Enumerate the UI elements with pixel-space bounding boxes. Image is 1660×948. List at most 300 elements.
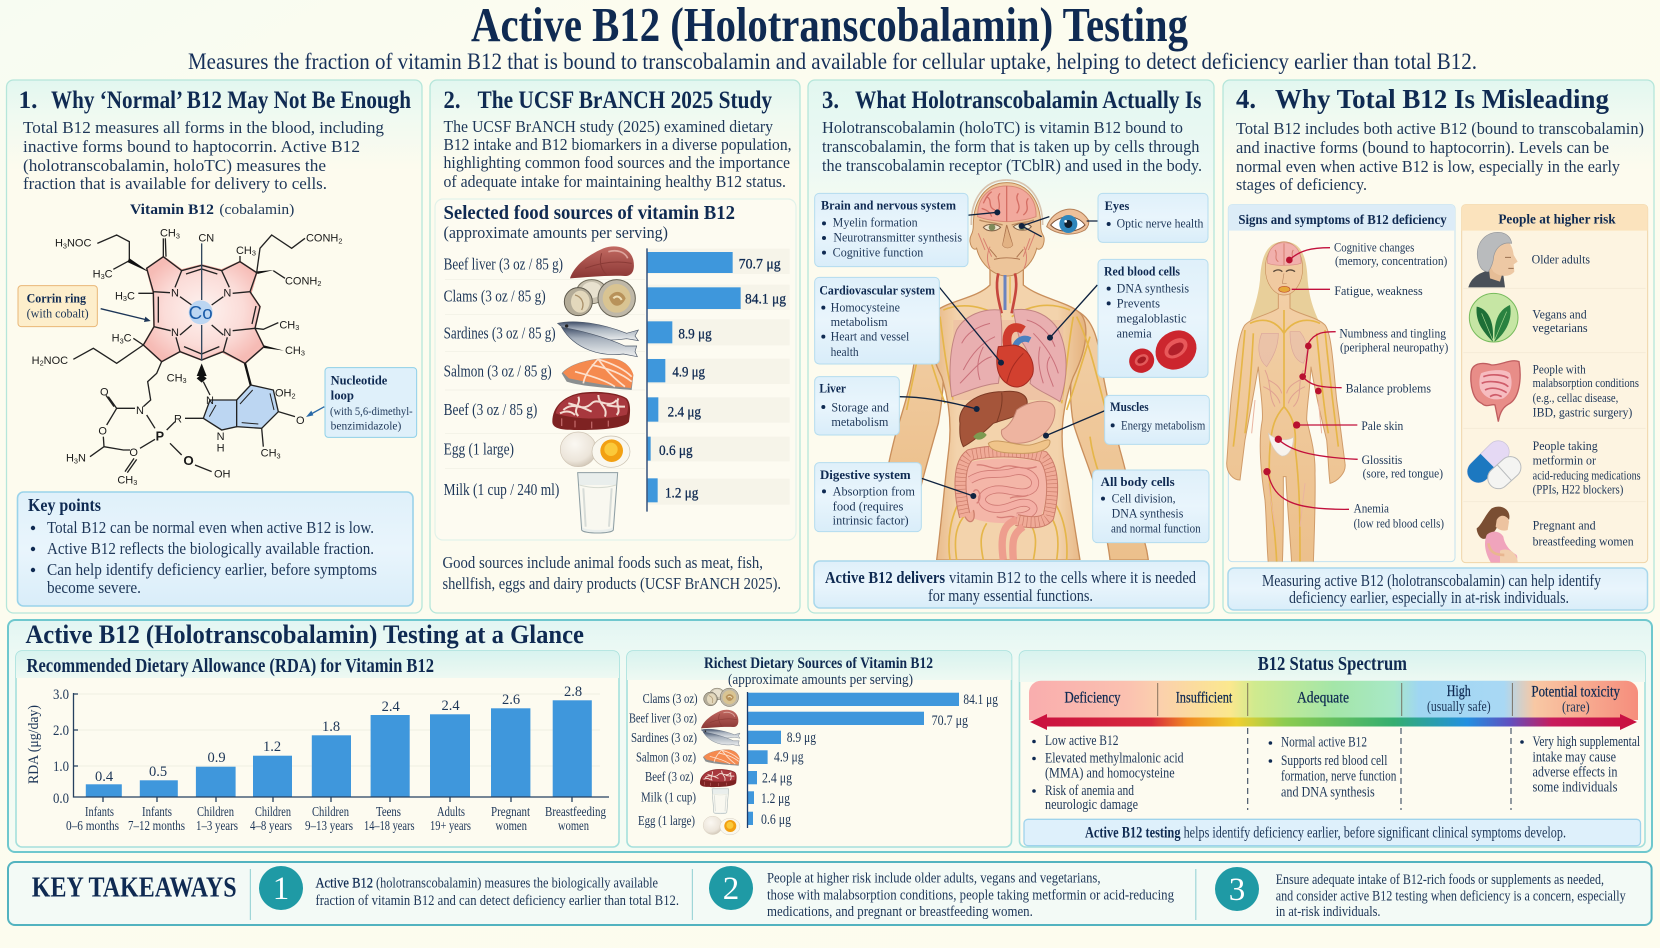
food row labels: Clams (3 oz): [643, 692, 698, 707]
callout: nucleotide loop: loop: [331, 387, 354, 402]
dashed dividers: [1248, 728, 1511, 810]
molecule side chains: O: [98, 425, 107, 437]
y tick labels: 1.0: [53, 759, 69, 775]
callout: brain and nervous system: Neurotransmitter synthesis: [833, 231, 962, 245]
panel: key takeaways: [8, 862, 1652, 925]
molecule side chains: 2: [40, 359, 44, 368]
molecule side chains: 3: [74, 456, 78, 465]
column: toxicity bullets: some individuals: [1532, 780, 1618, 796]
callout: brain and nervous system: Brain and nervous system: [821, 198, 956, 212]
icon: older adult: [1468, 232, 1518, 287]
symptom labels: (memory, concentration): [1335, 254, 1447, 268]
card: signs and symptoms: Signs and symptoms of B12 deficiency: [1238, 212, 1447, 227]
heading: panel 2: 2.: [444, 87, 460, 114]
y tick labels: 2.0: [53, 723, 69, 739]
molecule side chains: O: [183, 453, 194, 468]
molecule side chains: NOC: [67, 238, 91, 250]
food labels: Salmon (3 oz / 85 g): [444, 362, 552, 381]
category labels: [66, 805, 606, 834]
symptom labels: Pale skin: [1361, 419, 1404, 433]
molecule side chains: H: [115, 290, 123, 302]
molecule side chains: NOC: [44, 355, 68, 367]
callout: digestive system: intrinsic factor): [833, 514, 909, 528]
value labels: 2.4: [382, 699, 401, 715]
callout: all body cells: [1093, 470, 1209, 543]
key points box: [18, 492, 413, 606]
risk labels: Pregnant and: [1533, 518, 1596, 532]
callout: testing helps identify: [1024, 819, 1640, 846]
takeaway 1: [259, 866, 679, 910]
symptom labels: Glossitis: [1362, 453, 1402, 467]
symptom labels: (sore, red tongue): [1363, 466, 1443, 480]
panel 3: what holotranscobalamin actually is: [808, 80, 1214, 613]
card heading: (approximate amounts per serving): [444, 223, 668, 242]
icon: pregnant woman: [1477, 507, 1518, 564]
symptom labels: [1334, 241, 1448, 530]
spectrum heading: B12 Status Spectrum: [1258, 653, 1407, 675]
molecule side chains: CH: [160, 228, 176, 240]
food labels: Beef liver (3 oz / 85 g): [444, 254, 563, 273]
column: deficiency bullets: Risk of anemia and: [1045, 783, 1135, 799]
callout: red blood cells: DNA synthesis: [1117, 282, 1189, 296]
text block: good sources: Good sources include animal foods such as meat, fish,: [442, 553, 763, 572]
callout: nucleotide loop: [306, 368, 417, 437]
category labels: 14–18 years: [364, 819, 414, 834]
molecule side chains: C: [105, 268, 113, 280]
category labels: 0–6 months: [66, 819, 119, 834]
callout: muscles: Energy metabolism: [1121, 418, 1205, 432]
icon: milk glass: [578, 473, 618, 533]
risk labels: malabsorption conditions: [1533, 376, 1639, 390]
food labels: Sardines (3 oz / 85 g): [444, 323, 556, 342]
bar chart: RDA: [53, 684, 609, 834]
category labels: women: [558, 819, 589, 834]
takeaway 2: People at higher risk include older adults, vegans and vegetarians,: [767, 871, 1100, 887]
callout: cardiovascular system: Homocysteine: [831, 301, 900, 315]
risk labels: (PPIs, H22 blockers): [1533, 482, 1623, 496]
molecule side chains: R: [174, 414, 182, 426]
bar chart: richest sources: 84.1 μg: [963, 692, 998, 708]
category labels: Children: [255, 805, 291, 820]
molecule side chains: 3: [133, 478, 137, 487]
molecule side chains: CN: [198, 233, 214, 245]
text block: panel 4 intro: stages of deficiency.: [1236, 175, 1367, 194]
heading: panel 3: 3.: [822, 87, 839, 114]
category labels: Breastfeeding: [545, 805, 606, 820]
food row labels: Salmon (3 oz): [636, 751, 696, 766]
values: 2.4 μg: [668, 405, 702, 421]
spectrum band: [1029, 681, 1638, 720]
molecule side chains: 3: [120, 336, 124, 345]
column: adequate bullets: Supports red blood cell: [1281, 753, 1387, 769]
symptom labels: (peripheral neuropathy): [1340, 341, 1448, 355]
symptom labels: Balance problems: [1346, 382, 1431, 396]
molecule side chains: CH: [285, 345, 301, 357]
value labels: 0.4: [95, 769, 114, 785]
takeaway 2: 2: [723, 871, 739, 907]
molecule side chains: 3: [301, 349, 305, 358]
callout: cardiovascular system: [815, 277, 939, 364]
text block: panel 2 intro: highlighting common food sources and the importance: [444, 153, 790, 172]
risk labels: People with: [1533, 362, 1586, 376]
value labels: 0.9: [207, 750, 226, 766]
callout: brain and nervous system: [815, 193, 968, 267]
text block: panel 2 intro: [444, 117, 792, 191]
bar chart: richest sources: 70.7 μg: [932, 713, 968, 729]
value labels: 1.8: [322, 719, 340, 735]
icon: red blood cells: [1125, 322, 1204, 378]
callout: liver: [815, 377, 899, 435]
corrin ring: N: [223, 288, 231, 300]
icon: leaves: [1469, 293, 1518, 342]
column: deficiency bullets: (MMA) and homocysteine: [1045, 766, 1175, 782]
corrin ring: N: [223, 327, 231, 339]
takeaway 3: in at-risk individuals.: [1276, 904, 1380, 920]
molecule side chains: CH: [279, 319, 295, 331]
risk labels: IBD, gastric surgery): [1533, 406, 1632, 420]
text block: good sources: [442, 553, 781, 593]
text block: panel 3 intro: [822, 118, 1202, 175]
callout: nucleotide loop: (with 5,6-dimethyl-: [330, 404, 413, 418]
category labels: Teens: [376, 805, 401, 820]
text block: panel 4 intro: Total B12 includes both active B12 (bound to transcobalamin): [1236, 119, 1644, 138]
molecule side chains: H: [32, 355, 40, 367]
callout: corrin ring: (with cobalt): [27, 306, 89, 320]
callout: cardiovascular system: metabolism: [831, 315, 888, 329]
callout: cardiovascular system: Heart and vessel: [831, 330, 910, 344]
symptom labels: (low red blood cells): [1354, 516, 1444, 530]
y tick labels: [53, 687, 69, 807]
icon: salmon: [562, 358, 633, 390]
key points box: become severe.: [47, 578, 141, 597]
heading: panel 4: 4.: [1236, 84, 1256, 114]
callout: red blood cells: megaloblastic: [1117, 312, 1187, 326]
callout: liver: metabolism: [831, 415, 888, 429]
icon: beef liver: [570, 246, 634, 278]
risk labels: (e.g., cellac disease,: [1533, 391, 1618, 405]
food labels: Clams (3 oz / 85 g): [444, 287, 546, 306]
molecule side chains: OH: [214, 468, 231, 480]
category labels: 19+ years: [430, 819, 471, 834]
molecule side chains: N: [217, 431, 225, 443]
risk labels: People taking: [1533, 439, 1598, 453]
text block: panel 4 intro: [1236, 119, 1644, 194]
icon: sardines: [558, 322, 638, 357]
callout: nucleotide loop: benzimidazole): [331, 419, 401, 433]
values: 0.6 μg: [659, 443, 693, 459]
icon: beef: [552, 392, 630, 430]
molecule side chains: 2: [338, 236, 342, 245]
text block: good sources: shellfish, eggs and dairy products (UCSF BrANCH 2025).: [442, 574, 781, 593]
food labels: [444, 254, 563, 499]
molecule side chains: 3: [295, 323, 299, 332]
risk labels: Vegans and: [1532, 307, 1587, 321]
panel 4: why total B12 is misleading: [1223, 80, 1654, 613]
molecule side chains: H: [112, 333, 120, 345]
richest heading: (approximate amounts per serving): [728, 672, 913, 688]
molecule title: (cobalamin): [219, 202, 294, 218]
card heading: [444, 202, 735, 242]
callout: eyes: Optic nerve health: [1117, 217, 1204, 231]
food row labels: Milk (1 cup): [641, 791, 696, 806]
molecule side chains: CH: [167, 372, 183, 384]
spectrum band: (rare): [1562, 700, 1590, 716]
callout: liver: Liver: [819, 382, 846, 396]
takeaway 3: [1215, 867, 1626, 920]
card heading: Selected food sources of vitamin B12: [444, 202, 735, 224]
category labels: Adults: [437, 805, 465, 820]
callout: liver: Storage and: [831, 400, 890, 414]
molecule side chains: OH: [275, 388, 291, 400]
food row labels: Egg (1 large): [638, 814, 695, 829]
sub-panel: RDA chart: [16, 651, 619, 847]
callout: all body cells: DNA synthesis: [1112, 507, 1183, 521]
takeaway 1: 1: [273, 871, 289, 907]
risk labels: metformin or: [1533, 454, 1597, 468]
values: 84.1 μg: [745, 291, 787, 307]
symptom pointers: [1263, 248, 1358, 509]
molecule side chains: CONH: [306, 233, 338, 245]
panel: testing at a glance: [8, 620, 1652, 852]
key points box: Can help identify deficiency earlier, before symptoms: [47, 560, 377, 579]
spectrum band: High: [1447, 683, 1471, 700]
category labels: 4–8 years: [250, 819, 292, 834]
molecule title: Vitamin B12: [130, 202, 214, 218]
food row labels: [629, 692, 698, 829]
corrin ring: [143, 243, 264, 363]
callout: active B12 delivers: for many essential functions.: [928, 586, 1093, 605]
callout: digestive system: Absorption from: [833, 485, 915, 499]
column: adequate bullets: and DNA synthesis: [1281, 785, 1375, 801]
column: adequate bullets: Normal active B12: [1281, 735, 1367, 751]
category labels: Children: [312, 805, 349, 820]
bar chart: richest sources: 8.9 μg: [787, 730, 816, 746]
text block: panel 1 intro: fraction that is available for delivery to cells.: [23, 174, 327, 193]
richest heading: [704, 655, 933, 688]
molecule side chains: O: [100, 387, 109, 399]
molecule side chains: CH: [261, 448, 277, 460]
molecule diagram: vitamin B12: [18, 202, 417, 487]
heading: at a glance: Active B12 (Holotranscobalamin) Testing at a Glance: [26, 620, 584, 649]
text block: panel 1 intro: [23, 118, 384, 193]
value labels: 2.8: [564, 684, 582, 700]
values: 70.7 μg: [739, 256, 781, 272]
subtitle: Measures the fraction of vitamin B12 that is bound to transcobalamin and available for cellular uptake, helping to detect deficiency earlier than total B12.: [188, 49, 1477, 74]
takeaway 2: those with malabsorption conditions, people taking metformin or acid-reducing: [767, 887, 1174, 903]
molecule side chains: 2: [291, 391, 296, 400]
category labels: Infants: [142, 805, 172, 820]
molecule side chains: H: [93, 268, 101, 280]
text block: panel 3 intro: the transcobalamin receptor (TCblR) and used in the body.: [822, 156, 1202, 175]
callout: red blood cells: Red blood cells: [1104, 264, 1180, 278]
risk labels: vegetarians: [1532, 321, 1588, 335]
callout: eyes: Eyes: [1105, 199, 1129, 213]
icon: eye: [1047, 209, 1089, 234]
takeaway 1: fraction of vitamin B12 and can detect deficiency earlier than total B12.: [316, 893, 679, 909]
molecule side chains: P: [156, 430, 165, 444]
symptom labels: Fatigue, weakness: [1334, 284, 1423, 298]
callout: measuring active B12: deficiency earlier, especially in at-risk individuals.: [1289, 588, 1569, 607]
sub-panel: B12 status spectrum: [1020, 651, 1645, 847]
card: people at higher risk: People at higher risk: [1498, 211, 1616, 226]
column: deficiency bullets: Elevated methylmalonic acid: [1045, 750, 1184, 766]
values: 4.9 μg: [672, 365, 706, 381]
values: [659, 256, 787, 501]
spectrum band: (usually safe): [1427, 699, 1491, 715]
column: deficiency bullets: [1032, 733, 1184, 813]
panel 2: UCSF BrANCH study: [430, 80, 800, 613]
molecule side chains: 3: [101, 272, 105, 281]
callout: eyes: [1098, 193, 1208, 242]
bar chart: richest sources: 2.4 μg: [762, 771, 792, 787]
callout: testing helps identify: helps identify deficiency earlier, before significant clinical symptoms develop.: [1184, 825, 1566, 842]
bar chart: richest sources: 0.6 μg: [761, 812, 791, 828]
molecule side chains: 3: [123, 294, 127, 303]
molecule side chains: CH: [236, 245, 252, 257]
category labels: women: [496, 819, 527, 834]
value labels: 0.5: [149, 764, 167, 780]
sub-panel: richest dietary sources: [627, 651, 1012, 847]
heading: panel 1: Why ‘Normal’ B12 May Not Be Enough: [51, 87, 411, 114]
symptom labels: Cognitive changes: [1334, 241, 1414, 255]
heading: panel 4: Why Total B12 Is Misleading: [1275, 84, 1609, 114]
food labels: Beef (3 oz / 85 g): [444, 400, 537, 419]
anatomy diagram: human body: [815, 180, 1209, 560]
callout: muscles: [1105, 395, 1209, 444]
symptom labels: Numbness and tingling: [1339, 326, 1447, 340]
callout: digestive system: Digestive system: [820, 468, 911, 482]
takeaway 2: medications, and pregnant or breastfeeding women.: [767, 904, 1033, 920]
category labels: 7–12 months: [128, 819, 185, 834]
molecule side chains: 3: [176, 231, 180, 240]
icon: egg: [560, 432, 630, 467]
risk labels: breastfeeding women: [1533, 534, 1634, 548]
column: deficiency bullets: neurologic damage: [1045, 797, 1138, 813]
key points box: Active B12 reflects the biologically available fraction.: [47, 539, 374, 558]
callout: corrin ring: [18, 286, 151, 327]
food row labels: Sardines (3 oz): [631, 731, 697, 746]
molecule side chains: C: [127, 290, 135, 302]
small food icons: [700, 688, 740, 835]
callout: red blood cells: anemia: [1117, 326, 1152, 340]
key points box: Key points: [28, 495, 101, 515]
molecule side chains: O: [296, 415, 305, 427]
icon: pills: [1463, 436, 1525, 493]
bar chart: food sources: [444, 246, 790, 533]
text block: panel 4 intro: normal even when active B12 is low, especially in the early: [1236, 157, 1620, 176]
callout: red blood cells: Prevents: [1117, 296, 1160, 310]
risk labels: Older adults: [1532, 252, 1590, 266]
category labels: Pregnant: [491, 805, 530, 820]
molecule side chains: C: [124, 333, 132, 345]
molecule side chains: N: [206, 395, 214, 407]
column: toxicity bullets: [1520, 734, 1640, 796]
molecule side chains: [32, 228, 342, 487]
molecule side chains: H: [55, 238, 63, 250]
bar chart: richest sources: 1.2 μg: [761, 791, 790, 807]
callout: brain and nervous system: Cognitive function: [833, 246, 924, 260]
spectrum band: Potential toxicity: [1531, 684, 1620, 701]
takeaway 1: Active B12: [316, 875, 373, 891]
body illustration: [885, 180, 1148, 560]
column: deficiency bullets: Low active B12: [1045, 733, 1118, 749]
spectrum band: Adequate: [1297, 690, 1349, 707]
value labels: 2.6: [502, 692, 520, 708]
pointers: anatomy lines: [899, 209, 1105, 499]
heading: panel 2: The UCSF BrANCH 2025 Study: [478, 87, 772, 114]
value labels: 2.4: [441, 698, 460, 714]
takeaway 1: (holotranscobalamin) measures the biologically available: [376, 875, 658, 891]
values: 8.9 μg: [678, 326, 712, 342]
callout: all body cells: and normal function: [1111, 522, 1201, 536]
molecule side chains: 3: [252, 249, 256, 258]
spectrum band: Insufficient: [1176, 690, 1233, 707]
text block: panel 2 intro: of adequate intake for maintaining healthy B12 status.: [444, 172, 786, 191]
callout: all body cells: All body cells: [1101, 475, 1175, 489]
category labels: Infants: [85, 805, 114, 820]
molecule side chains: CONH: [285, 275, 317, 287]
text block: panel 3 intro: transcobalamin, the form that is taken up by cells through: [822, 137, 1200, 156]
card: selected food sources: [435, 199, 796, 540]
callout: cardiovascular system: health: [831, 345, 859, 359]
spectrum band: Deficiency: [1064, 690, 1121, 707]
corrin ring: N: [171, 327, 179, 339]
bar chart: richest sources: 4.9 μg: [774, 750, 804, 766]
icon: intestine: [1471, 361, 1520, 422]
callout: corrin ring: Corrin ring: [27, 290, 86, 305]
text block: panel 4 intro: and inactive forms (bound to haptocorrin). Levels can be: [1236, 138, 1609, 157]
bars: [648, 252, 741, 502]
text block: panel 3 intro: Holotranscobalamin (holoTC) is vitamin B12 bound to: [822, 118, 1183, 137]
spectrum arrow: [1030, 714, 1637, 730]
card: signs and symptoms: [1227, 205, 1455, 563]
callout: brain and nervous system: Myelin formation: [833, 216, 918, 230]
heading: panel 3: What Holotranscobalamin Actually Is: [855, 87, 1202, 114]
takeaway 2: [709, 866, 1174, 920]
molecule side chains: 3: [183, 376, 187, 385]
category labels: 1–3 years: [196, 819, 238, 834]
text block: panel 1 intro: inactive forms bound to haptocorrin. Active B12: [23, 137, 360, 156]
takeaway 3: 3: [1229, 872, 1245, 908]
food row labels: Beef liver (3 oz): [629, 712, 697, 727]
text block: panel 2 intro: The UCSF BrANCH study (2025) examined dietary: [444, 117, 774, 136]
food labels: Milk (1 cup / 240 ml): [444, 480, 559, 499]
value labels: [95, 684, 582, 785]
callout: active B12 delivers: vitamin B12 to the cells where it is needed: [949, 568, 1196, 587]
value labels: 1.2: [263, 739, 281, 755]
y tick labels: 0.0: [53, 791, 69, 807]
sub-panels: signs and risk: [1227, 205, 1648, 564]
female body illustration: [1227, 242, 1345, 563]
food row labels: Beef (3 oz): [645, 770, 694, 785]
heading: panel 1: 1.: [18, 87, 38, 114]
symptom labels: Anemia: [1354, 502, 1389, 516]
callout: testing helps identify: Active B12 testing: [1085, 825, 1181, 842]
molecule side chains: 3: [63, 241, 67, 250]
icon: clams: [564, 280, 635, 317]
food labels: Egg (1 large): [444, 439, 514, 458]
text block: panel 2 intro: B12 intake and B12 biomarkers in a diverse population,: [444, 135, 792, 154]
molecule title: [130, 202, 294, 218]
category labels: Children: [197, 805, 234, 820]
corrin ring: Co: [189, 302, 213, 323]
column: adequate bullets: formation, nerve function: [1281, 769, 1397, 785]
risk labels: [1532, 252, 1641, 548]
callout: all body cells: Cell division,: [1112, 492, 1176, 506]
callout: nucleotide loop: Nucleotide: [331, 372, 388, 387]
callout: muscles: Muscles: [1110, 400, 1149, 414]
molecule side chains: 2: [317, 279, 321, 288]
